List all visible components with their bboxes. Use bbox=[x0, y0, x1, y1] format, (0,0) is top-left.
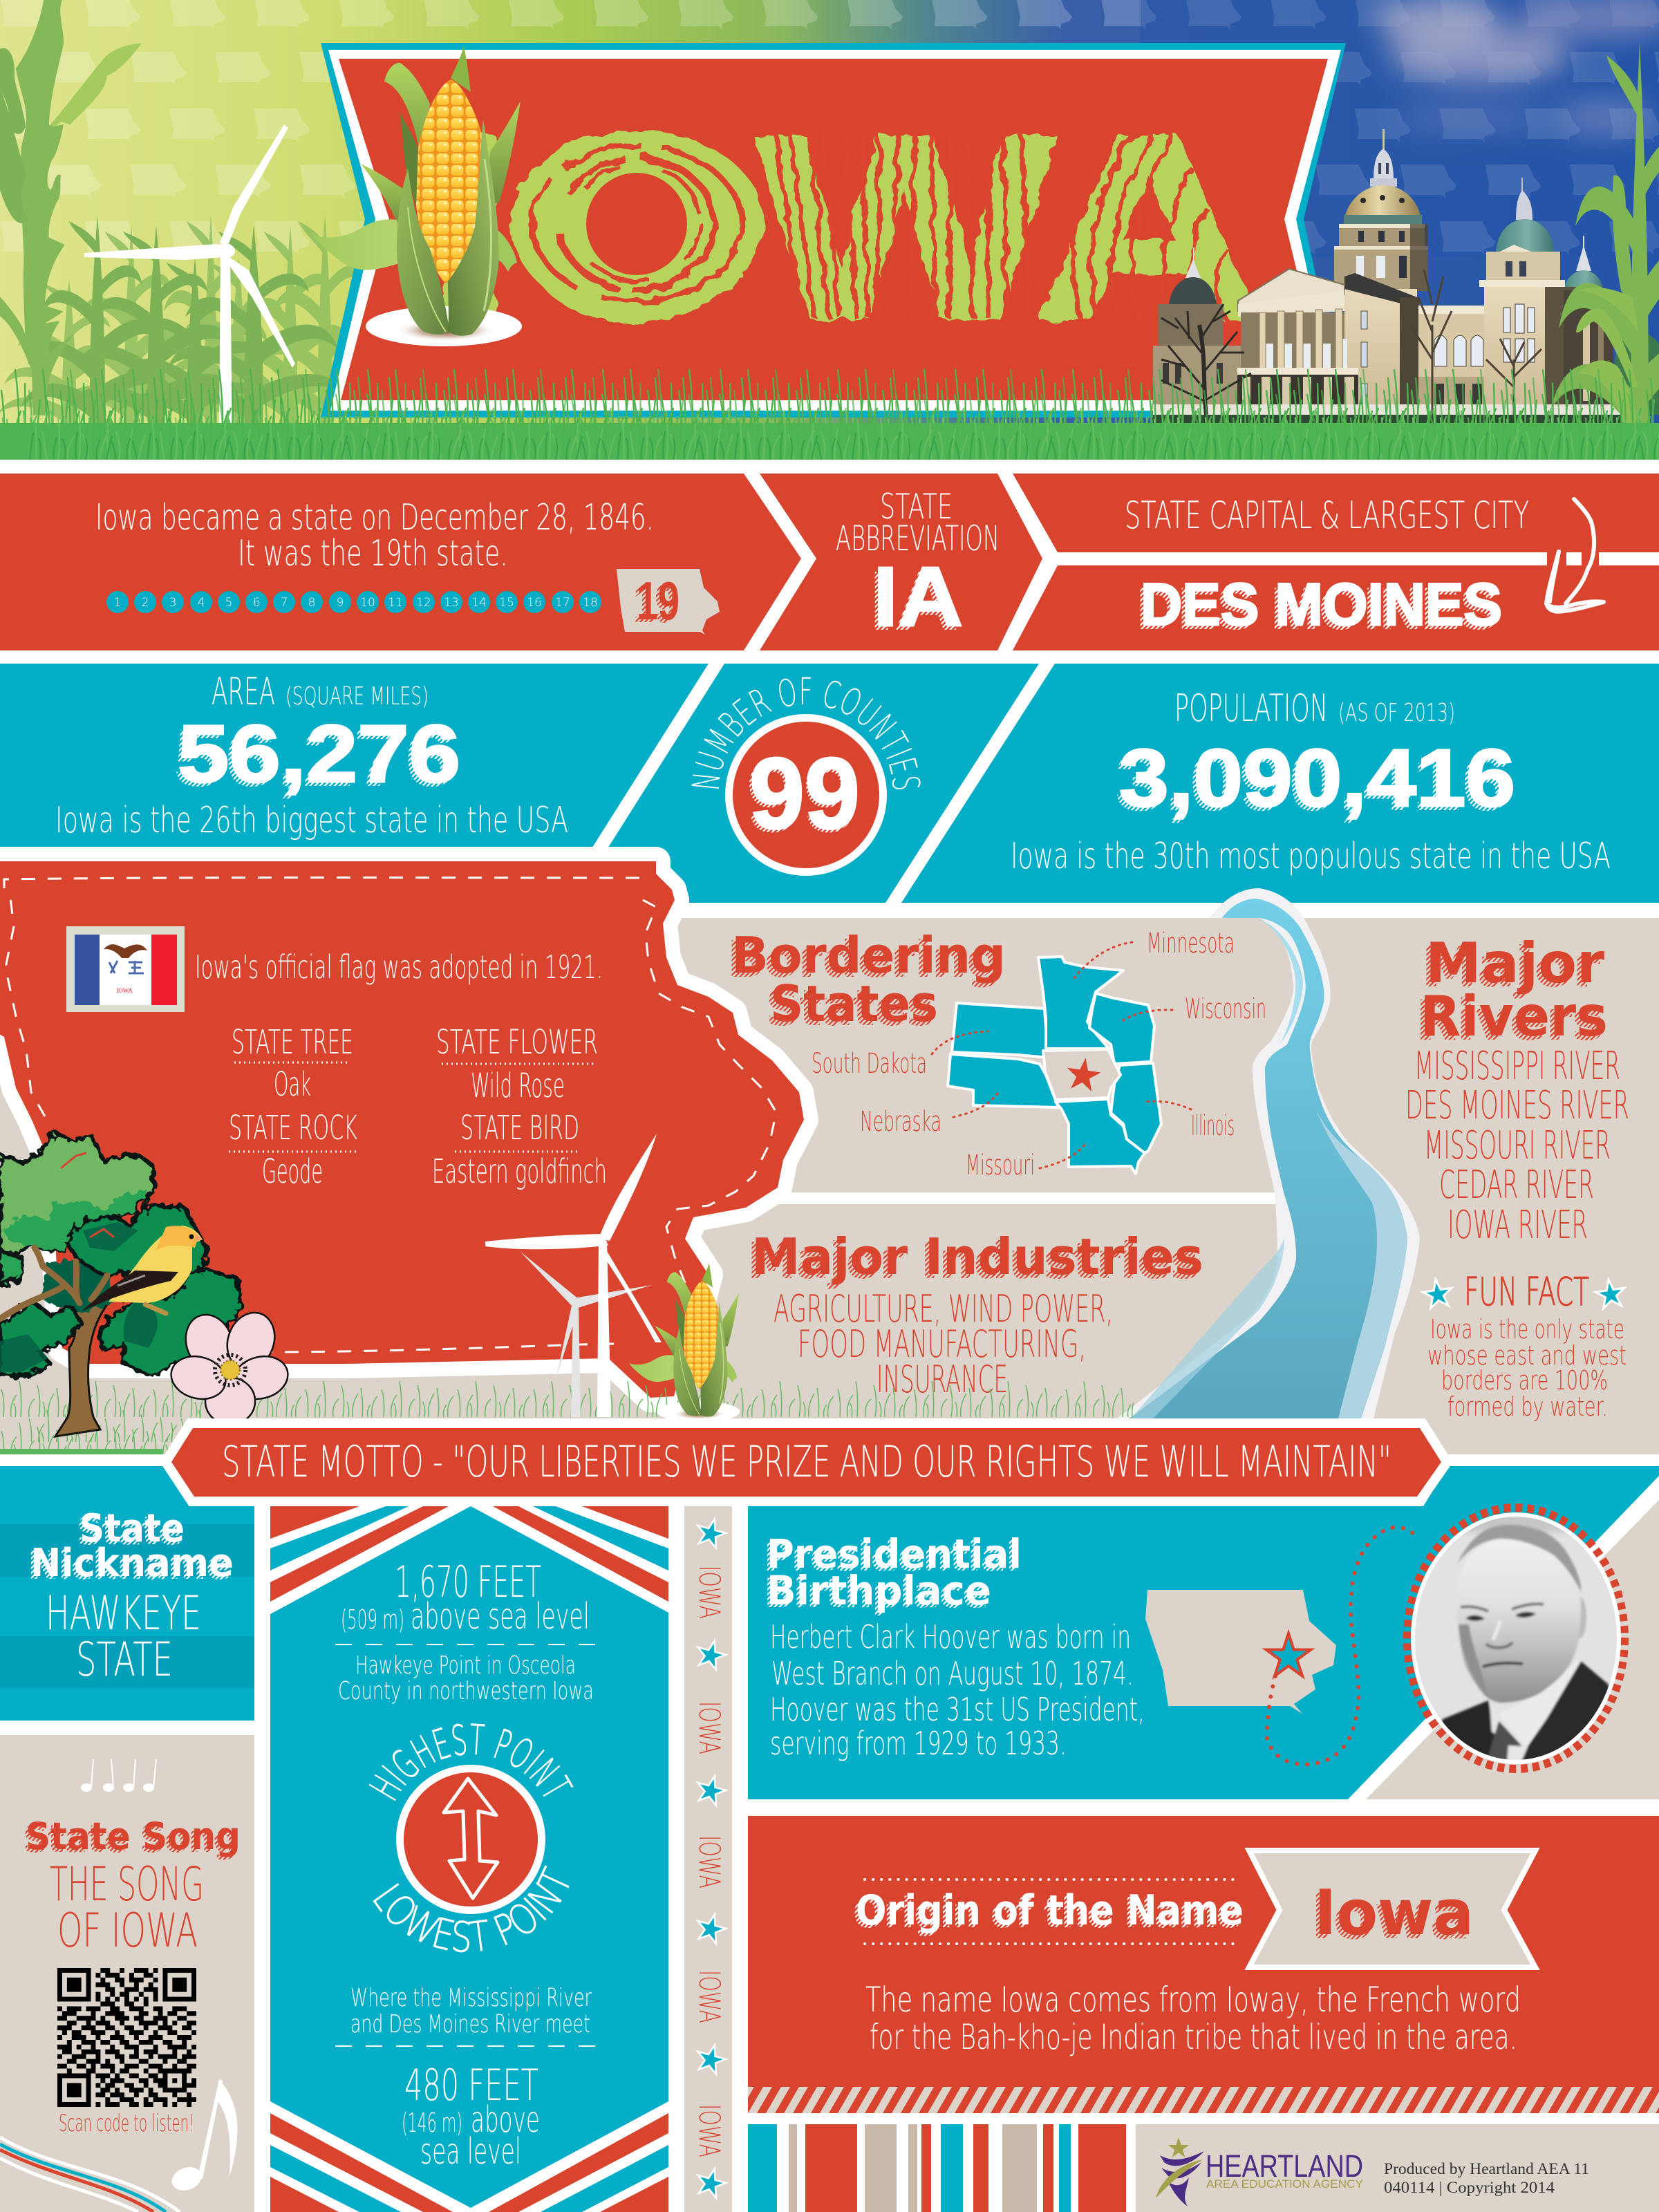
bordering states heading: States bbox=[766, 979, 934, 1037]
origin of the name panel bbox=[748, 1816, 1659, 2113]
capital bbox=[1125, 494, 1529, 642]
abbreviation: IA bbox=[869, 554, 959, 648]
face bbox=[1456, 1538, 1581, 1703]
capital: DES MOINES bbox=[1141, 572, 1502, 638]
highest lowest badge: HIGHEST POINT bbox=[369, 1723, 574, 1801]
statehood number dots bbox=[106, 591, 601, 613]
state song panel bbox=[0, 1735, 254, 2212]
major industries: FOOD MANUFACTURING, bbox=[798, 1322, 1086, 1366]
area: (SQUARE MILES) bbox=[285, 682, 429, 711]
wind turbine bbox=[84, 124, 295, 445]
state symbols: Oak bbox=[274, 1065, 311, 1104]
portico bbox=[1237, 269, 1358, 415]
small corn bbox=[629, 1263, 740, 1423]
shirt and collar bbox=[1498, 1661, 1581, 1747]
birthplace star bbox=[1266, 1633, 1311, 1676]
major industries: Major Industries bbox=[751, 1228, 1203, 1286]
motto banner bbox=[171, 1428, 1441, 1497]
major rivers bbox=[1405, 931, 1629, 1422]
scan caption: Scan code to listen! bbox=[59, 2110, 194, 2137]
presidential heading bbox=[764, 1530, 1022, 1617]
population bbox=[1011, 686, 1611, 877]
statehood number dots: 15 bbox=[499, 596, 514, 610]
iowa ribbon bbox=[1249, 1850, 1535, 1967]
statehood number dots: 4 bbox=[198, 596, 205, 610]
dotted route bbox=[1267, 1527, 1420, 1765]
nickname heading: State bbox=[77, 1509, 182, 1554]
ear bbox=[1573, 1597, 1586, 1638]
iowa ribbon: Iowa bbox=[1311, 1881, 1470, 1953]
statehood number dots: 3 bbox=[169, 596, 176, 610]
large music note bbox=[169, 2079, 237, 2195]
abbreviation: ABBREVIATION bbox=[836, 518, 1000, 559]
bordering states heading: Bordering bbox=[731, 926, 1006, 984]
iowa map bbox=[1145, 1590, 1336, 1714]
area bbox=[55, 670, 568, 841]
flag: IOWA bbox=[116, 987, 133, 994]
nose bbox=[1486, 1642, 1512, 1648]
credits text: 040114 | Copyright 2014 bbox=[1384, 2179, 1555, 2196]
iowa side strip: IOWA bbox=[693, 1970, 727, 2023]
eyes bbox=[1465, 1615, 1485, 1621]
counties: 99 bbox=[749, 737, 860, 850]
top chevrons bbox=[270, 1506, 671, 1614]
left wing with small dome bbox=[1153, 247, 1243, 415]
highest point text: Hawkeye Point in Osceola bbox=[355, 1651, 576, 1680]
population: 3,090,416 bbox=[1115, 737, 1511, 828]
qr code bbox=[57, 1968, 196, 2107]
state labels bbox=[812, 928, 1266, 1181]
statehood number dots: 11 bbox=[388, 596, 403, 610]
left cheek shade bbox=[1459, 1624, 1488, 1697]
goldfinch bbox=[82, 1226, 203, 1313]
statehood text: Iowa became a state on December 28, 1846. bbox=[95, 497, 654, 538]
portrait bbox=[1407, 1508, 1624, 1769]
iowa star bbox=[1065, 1056, 1103, 1092]
state song panel: State Song bbox=[26, 1815, 241, 1858]
song title bbox=[50, 1857, 204, 1958]
iowa side strip: IOWA bbox=[693, 2104, 727, 2157]
footer credits bbox=[1136, 2124, 1659, 2212]
right small dome bbox=[1564, 236, 1604, 290]
state symbols bbox=[229, 1023, 607, 1191]
statehood number dots: 12 bbox=[416, 596, 431, 610]
highest point text bbox=[335, 1557, 597, 2046]
state labels: Nebraska bbox=[860, 1106, 941, 1138]
nickname heading: State bbox=[79, 1506, 185, 1551]
origin text bbox=[865, 1980, 1521, 2057]
presidential heading: Presidential bbox=[764, 1533, 1019, 1580]
statehood number dots: 8 bbox=[308, 596, 315, 610]
east building shadow wing bbox=[1564, 290, 1659, 415]
credits text: Produced by Heartland AEA 11 bbox=[1384, 2160, 1589, 2177]
iowa side strip bbox=[684, 1506, 732, 2212]
statehood row bbox=[0, 474, 1659, 650]
rivers heading: Major bbox=[1425, 931, 1605, 995]
state symbols: Wild Rose bbox=[471, 1067, 565, 1105]
iowa shape with 19 bbox=[617, 569, 720, 635]
elevation panel bbox=[270, 1506, 668, 2212]
base and white ground bbox=[1153, 404, 1620, 415]
hoover text: serving from 1929 to 1933. bbox=[770, 1725, 1067, 1762]
song title: THE SONG bbox=[50, 1857, 204, 1912]
abbreviation: STATE bbox=[880, 487, 953, 527]
state symbols: Eastern goldfinch bbox=[432, 1152, 607, 1191]
highest point text: County in northwestern Iowa bbox=[338, 1677, 594, 1705]
wild rose bbox=[167, 1306, 292, 1425]
area: Iowa is the 26th biggest state in the USA bbox=[55, 800, 568, 841]
presidential heading: Birthplace bbox=[767, 1567, 991, 1614]
counties: NUMBER OF COUNTIES bbox=[691, 677, 921, 789]
suit right bbox=[1521, 1661, 1618, 1763]
header illustration bbox=[0, 0, 1659, 460]
state symbols: Geode bbox=[262, 1152, 323, 1191]
blue statistics row bbox=[0, 664, 1659, 903]
rivers heading bbox=[1416, 931, 1608, 1053]
statehood number dots: 7 bbox=[281, 596, 288, 610]
iowa shape with 19: 19 bbox=[633, 573, 676, 634]
nickname: STATE bbox=[76, 1633, 173, 1687]
music wave bbox=[0, 2137, 180, 2212]
hair bbox=[1457, 1525, 1581, 1592]
hoover text: Herbert Clark Hoover was born in bbox=[770, 1618, 1131, 1656]
state labels: Missouri bbox=[966, 1150, 1035, 1181]
river bbox=[1117, 888, 1420, 1418]
hoover text bbox=[770, 1618, 1145, 1762]
nickname bbox=[46, 1586, 201, 1687]
highest point text: above sea level bbox=[411, 1596, 590, 1638]
heartland logo: HEARTLAND bbox=[1206, 2148, 1363, 2184]
population: (AS OF 2013) bbox=[1338, 699, 1455, 727]
major industries: INSURANCE bbox=[877, 1358, 1008, 1401]
right tower bbox=[1479, 178, 1576, 404]
statehood number dots: 9 bbox=[337, 596, 344, 610]
heartland logo: AREA EDUCATION AGENCY bbox=[1206, 2177, 1363, 2191]
state symbols: STATE ROCK bbox=[229, 1109, 357, 1147]
statehood number dots: 5 bbox=[225, 596, 232, 610]
nickname heading bbox=[28, 1506, 234, 1588]
statehood text: It was the 19th state. bbox=[238, 533, 508, 574]
area: AREA bbox=[212, 670, 275, 713]
origin heading: Origin of the Name bbox=[853, 1889, 1241, 1938]
rivers heading: Major bbox=[1421, 935, 1601, 1000]
east wing bbox=[1418, 306, 1484, 415]
flag text: Iowa's official flag was adopted in 1921. bbox=[195, 948, 603, 986]
statehood number dots: 2 bbox=[142, 596, 149, 610]
lowest point text: and Des Moines River meet bbox=[350, 2010, 590, 2038]
song title: OF IOWA bbox=[57, 1904, 198, 1958]
arrow: up and down bbox=[444, 1779, 498, 1898]
title: IOWA bbox=[426, 83, 1262, 372]
state map panel bbox=[0, 861, 804, 1398]
population: POPULATION bbox=[1174, 686, 1328, 730]
brows bbox=[1461, 1604, 1544, 1611]
counties bbox=[691, 677, 921, 876]
statehood number dots: 16 bbox=[527, 596, 542, 610]
tree branches bbox=[0, 1248, 107, 1319]
right corn stalk bbox=[1550, 42, 1659, 449]
fun fact bbox=[1421, 1270, 1627, 1422]
arrow: hand drawn bbox=[1546, 499, 1604, 612]
lowest point text: sea level bbox=[420, 2131, 521, 2173]
footer stripes bbox=[748, 2124, 1126, 2212]
lowest point text: (146 m) bbox=[402, 2108, 462, 2138]
tree trunk bbox=[55, 1293, 111, 1436]
major industries bbox=[747, 1228, 1203, 1401]
sky background with iowa tiles bbox=[0, 0, 1659, 460]
iowa side strip: IOWA bbox=[693, 1701, 727, 1754]
grass on beige bbox=[0, 1376, 1134, 1454]
small notes bbox=[81, 1759, 156, 1792]
state symbols: STATE FLOWER bbox=[436, 1023, 598, 1062]
hoover text: Hoover was the 31st US President, bbox=[770, 1691, 1145, 1728]
statehood text bbox=[95, 497, 654, 574]
state symbols: STATE TREE bbox=[232, 1023, 353, 1062]
center block bbox=[1344, 273, 1419, 415]
presidential heading: Presidential bbox=[767, 1530, 1022, 1577]
map leaders bbox=[932, 942, 1191, 1168]
tree crown bbox=[0, 1132, 242, 1376]
lowest point text: above bbox=[471, 2099, 540, 2141]
rivers heading: Rivers bbox=[1420, 984, 1608, 1049]
population: 3,090,416 bbox=[1119, 733, 1515, 824]
flag bbox=[66, 926, 185, 1012]
iowa ribbon: Iowa bbox=[1314, 1877, 1474, 1949]
rivers heading: Rivers bbox=[1416, 988, 1604, 1053]
bottom chevrons bbox=[270, 2101, 668, 2212]
presidential heading: Birthplace bbox=[764, 1570, 988, 1617]
bordering states heading: Bordering bbox=[727, 930, 1002, 988]
wind turbines on map bbox=[485, 1134, 662, 1417]
grass bbox=[0, 342, 1659, 460]
abbreviation bbox=[836, 487, 1000, 648]
river names bbox=[1405, 1044, 1629, 1248]
state labels: Illinois bbox=[1191, 1110, 1235, 1142]
state symbols: STATE BIRD bbox=[460, 1109, 579, 1147]
iowa shape with 19: 19 bbox=[637, 570, 679, 631]
major industries: AGRICULTURE, WIND POWER, bbox=[774, 1287, 1113, 1331]
area: 56,276 bbox=[174, 713, 456, 804]
front turbine bbox=[485, 1134, 662, 1417]
capitol building bbox=[1153, 129, 1659, 423]
main stalk bbox=[0, 0, 142, 415]
regional map bbox=[948, 957, 1161, 1174]
capital: DES MOINES bbox=[1136, 576, 1498, 642]
nickname heading: Nickname bbox=[30, 1541, 234, 1586]
highest lowest badge bbox=[369, 1723, 574, 1952]
credits text bbox=[1384, 2160, 1589, 2196]
highest point text: (509 m) bbox=[341, 1604, 404, 1635]
beige middle background bbox=[0, 918, 1659, 1454]
highest point text: 1,670 FEET bbox=[395, 1557, 541, 1607]
presidential birthplace panel bbox=[748, 1466, 1659, 1799]
statehood number dots: 17 bbox=[555, 596, 570, 610]
statehood number dots: 18 bbox=[583, 596, 598, 610]
major industries: Major Industries bbox=[747, 1232, 1199, 1290]
origin heading: Origin of the Name bbox=[856, 1886, 1244, 1935]
area: 56,276 bbox=[178, 709, 460, 800]
iowa side strip: IOWA bbox=[693, 1835, 727, 1888]
stitched outline bbox=[4, 878, 776, 1352]
rear turbine bbox=[520, 1251, 652, 1417]
statehood number dots: 13 bbox=[444, 596, 459, 610]
nickname: HAWKEYE bbox=[46, 1586, 201, 1641]
state labels: Wisconsin bbox=[1185, 993, 1266, 1025]
bare trees bbox=[1161, 270, 1541, 415]
statehood number dots: 10 bbox=[360, 596, 375, 610]
title ribbon bbox=[321, 43, 1346, 418]
state labels: Minnesota bbox=[1147, 928, 1235, 959]
statehood number dots: 1 bbox=[114, 596, 121, 610]
bordering states heading: States bbox=[770, 975, 938, 1033]
iowa side strip: IOWA bbox=[693, 1566, 727, 1619]
statehood number dots: 6 bbox=[253, 596, 260, 610]
abbreviation: IA bbox=[873, 550, 963, 644]
statehood number dots: 14 bbox=[471, 596, 487, 610]
lowest point text bbox=[350, 1984, 592, 2173]
suit left bbox=[1424, 1700, 1495, 1763]
bordering states bbox=[727, 926, 1266, 1181]
main dome bbox=[1334, 129, 1428, 291]
highest lowest badge: LOWEST POINT bbox=[373, 1865, 570, 1952]
heartland logo bbox=[1156, 2137, 1363, 2206]
mouth bbox=[1483, 1663, 1523, 1667]
bordering states heading bbox=[727, 926, 1006, 1037]
hoover text: West Branch on August 10, 1874. bbox=[771, 1655, 1134, 1692]
left blue nickname panel bbox=[0, 1466, 254, 1721]
origin heading bbox=[853, 1880, 1244, 1944]
corn bbox=[313, 46, 522, 346]
song heading: State Song bbox=[23, 1817, 238, 1861]
state labels: South Dakota bbox=[812, 1048, 927, 1080]
lowest point text: Where the Mississippi River bbox=[350, 1984, 592, 2012]
oak tree bbox=[0, 1132, 242, 1436]
title bbox=[442, 130, 1248, 325]
nickname heading: Nickname bbox=[28, 1544, 231, 1588]
background corn stalks left bbox=[0, 0, 396, 429]
fun fact: FUN FACT bbox=[1464, 1270, 1589, 1315]
lowest point text: 480 FEET bbox=[404, 2060, 538, 2110]
counties: 99 bbox=[746, 740, 859, 853]
